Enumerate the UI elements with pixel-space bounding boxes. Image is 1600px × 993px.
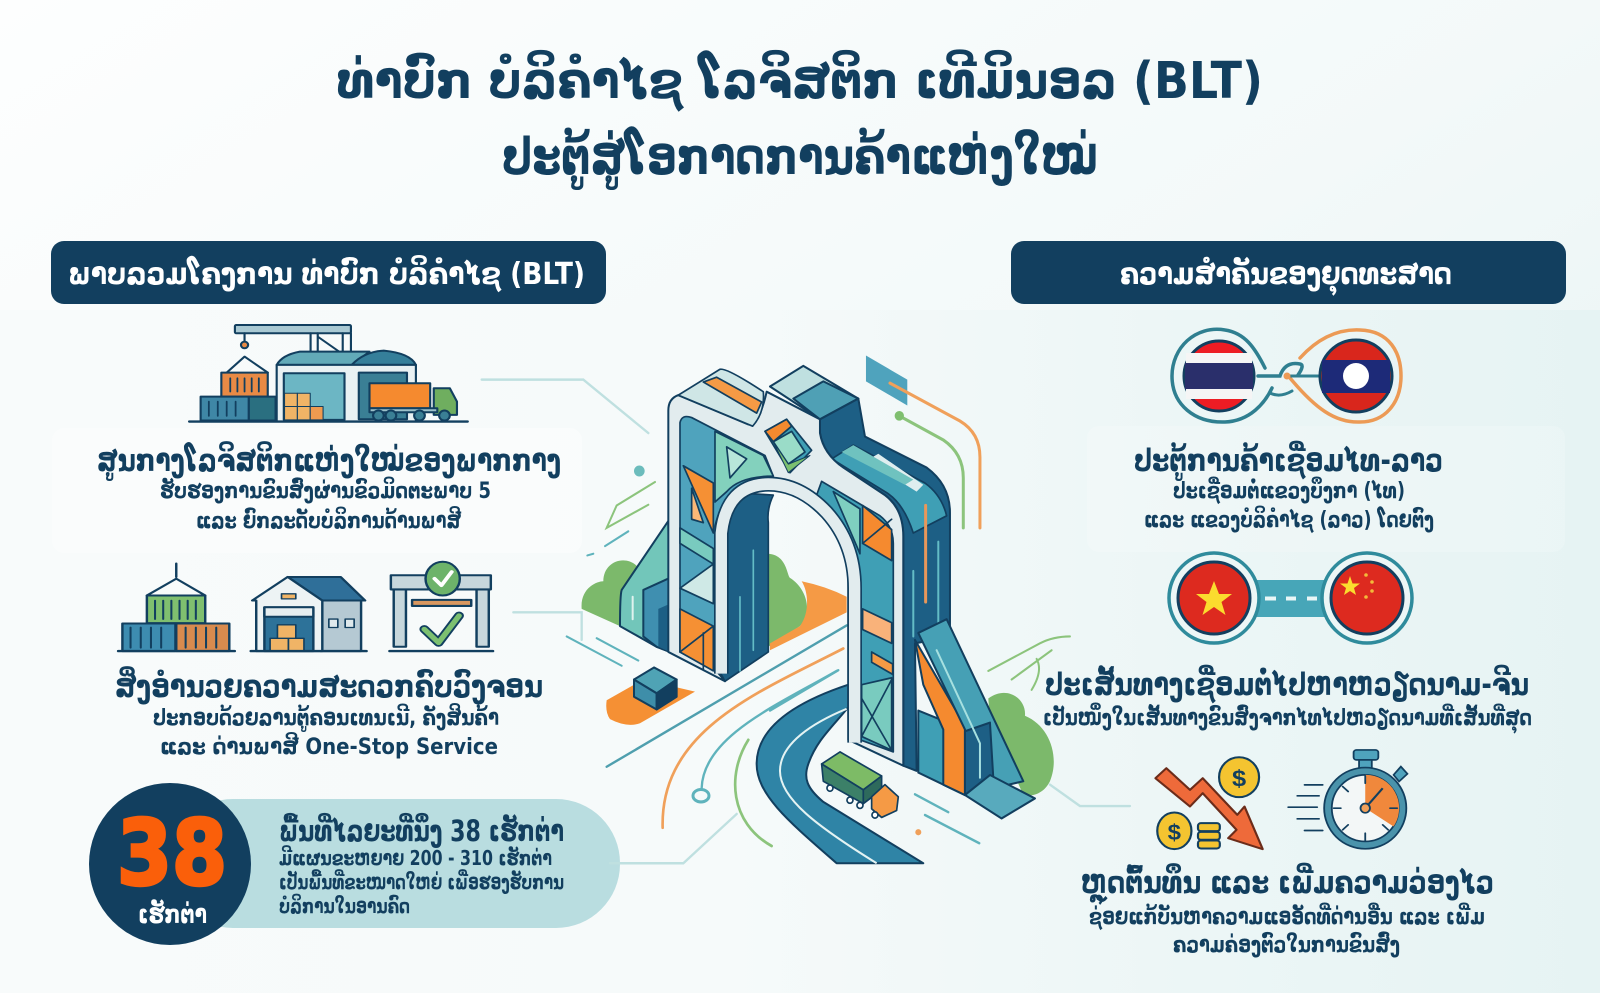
text block: comprehensive facilities: ປະກອບດ້ວຍລານຕູ້ຄອນເທນເນີ, ຄັງສິນຄ້າ <box>153 704 499 732</box>
title: ທ່າບົກ ບໍລິຄຳໄຊ ໂລຈິສຕິກ ເທີມິນອລ (BLT) <box>337 48 1263 113</box>
flag: Thailand <box>1184 341 1254 411</box>
unit: ເຮັກຕ່າ <box>138 898 207 930</box>
text block: new central logistics hub: ແລະ ຍົກລະດັບບໍລິການດ້ານພາສີ <box>196 506 462 534</box>
curved routes <box>607 625 847 846</box>
text block: reduce cost and increase speed: ຫຼຸດຕົ້ນທຶນ ແລະ ເພີ່ມຄວາມວ່ອງໄວ <box>1081 862 1494 906</box>
flag: China <box>1331 562 1403 634</box>
text block: Thai-Lao trade gateway: ປະຕູ້ການຄ້າເຊື່ອມໄທ-ລາວ <box>1134 440 1443 481</box>
text block: new central logistics hub: ຮັບຮອງການຂົນສົ່ງຜ່ານຂົວມິດຕະພາບ 5 <box>160 477 491 504</box>
left buttress <box>620 521 670 652</box>
text block: Thai-Lao trade gateway: ແລະ ແຂວງບໍລິຄຳໄຊ (ລາວ) ໂດຍຕົງ <box>1144 506 1434 533</box>
connector lines and accents <box>482 380 1130 863</box>
arch opening dark wall <box>719 493 773 681</box>
orange pad with cargo box <box>606 667 695 725</box>
arch right glass panels <box>817 481 893 752</box>
arch inner ring <box>721 484 855 743</box>
right ramp <box>915 619 1035 818</box>
text block: reduce cost and increase speed: ຄວາມຄ່ອງຕົວໃນການຂົນສົ່ງ <box>1173 931 1400 958</box>
area description: ເປັນພື້ນທີ່ຂະໜາດໃຫຍ່ ເພື່ອຮອງຮັບການ <box>279 870 564 894</box>
heading: project overview: ພາບລວມໂຄງການ ທ່າບົກ ບໍລິຄຳໄຊ (BLT) <box>68 255 585 293</box>
icon: Thailand and Laos flags linked <box>1172 329 1401 422</box>
text block: route to Vietnam and China <box>1043 664 1532 734</box>
text block: comprehensive facilities: ສິ່ງອຳນວຍຄວາມສະດວກຄົບວົງຈອນ <box>115 665 543 705</box>
area description: ບໍລິການໃນອານຄົດ <box>279 894 410 918</box>
title <box>337 48 1263 190</box>
truck <box>822 752 898 818</box>
icon: falling cost arrow with coins: $ <box>1232 766 1247 792</box>
big number: 38 <box>117 801 227 906</box>
text block: reduce cost and increase speed: ຊ່ອຍແກ້ບັນຫາຄວາມແອອັດທີ່ດ່ານອື່ນ ແລະ ເພີ່ມ <box>1089 903 1485 930</box>
text block: new central logistics hub <box>97 440 561 534</box>
diamond emblem <box>765 419 812 473</box>
text block: Thai-Lao trade gateway <box>1134 440 1443 533</box>
text block: comprehensive facilities <box>115 665 543 760</box>
icon: stopwatch with speed lines <box>1288 750 1407 849</box>
flag: Vietnam <box>1178 562 1250 634</box>
arch top left stripes <box>678 369 764 426</box>
arch front frame <box>668 392 903 766</box>
icon: logistics hub with crane, warehouse and truck <box>189 325 468 422</box>
area description: ມີແຜນຂະຫຍາຍ 200 - 310 ເຮັກຕ່າ <box>279 846 552 870</box>
text block: Thai-Lao trade gateway: ປະເຊື່ອມຕໍ່ແຂວງບຶງກາ (ໄທ) <box>1173 477 1405 504</box>
text block: comprehensive facilities: ແລະ ດ່ານພາສີ One-Stop Service <box>160 732 498 760</box>
heading: strategic importance: ຄວາມສຳຄັນຂອງຍຸດທະສາດ <box>1120 256 1452 296</box>
text block: reduce cost and increase speed <box>1081 862 1494 958</box>
arch right depth <box>770 366 950 771</box>
text block: new central logistics hub: ສູນກາງໂລຈິສຕິກແຫ່ງໃໝ່ຂອງພາກກາງ <box>97 440 561 481</box>
area description: ພື້ນທີ່ໄລຍະທີ່ນຶ່ງ 38 ເຮັກຕ່າ <box>279 813 564 848</box>
callout: 38 rai area <box>89 783 620 945</box>
heading: project overview <box>51 241 606 304</box>
icon: falling cost arrow with coins: $ <box>1168 820 1181 845</box>
title: ປະຕູ້ສູ່ໂອກາດການຄ້າແຫ່ງໃໝ່ <box>502 126 1098 190</box>
heading: strategic importance <box>1011 241 1566 304</box>
icon: Vietnam and China flags linked by road <box>1169 553 1412 643</box>
flag: Laos <box>1320 340 1392 412</box>
illustration: isometric gateway arch <box>482 356 1130 863</box>
area description <box>279 813 564 918</box>
road <box>757 685 923 863</box>
bushes and ground <box>582 554 1054 796</box>
icon: containers, warehouse and customs gate <box>118 562 493 651</box>
icon: falling cost arrow with coins <box>1155 757 1263 849</box>
arch left glass panels <box>680 417 773 671</box>
